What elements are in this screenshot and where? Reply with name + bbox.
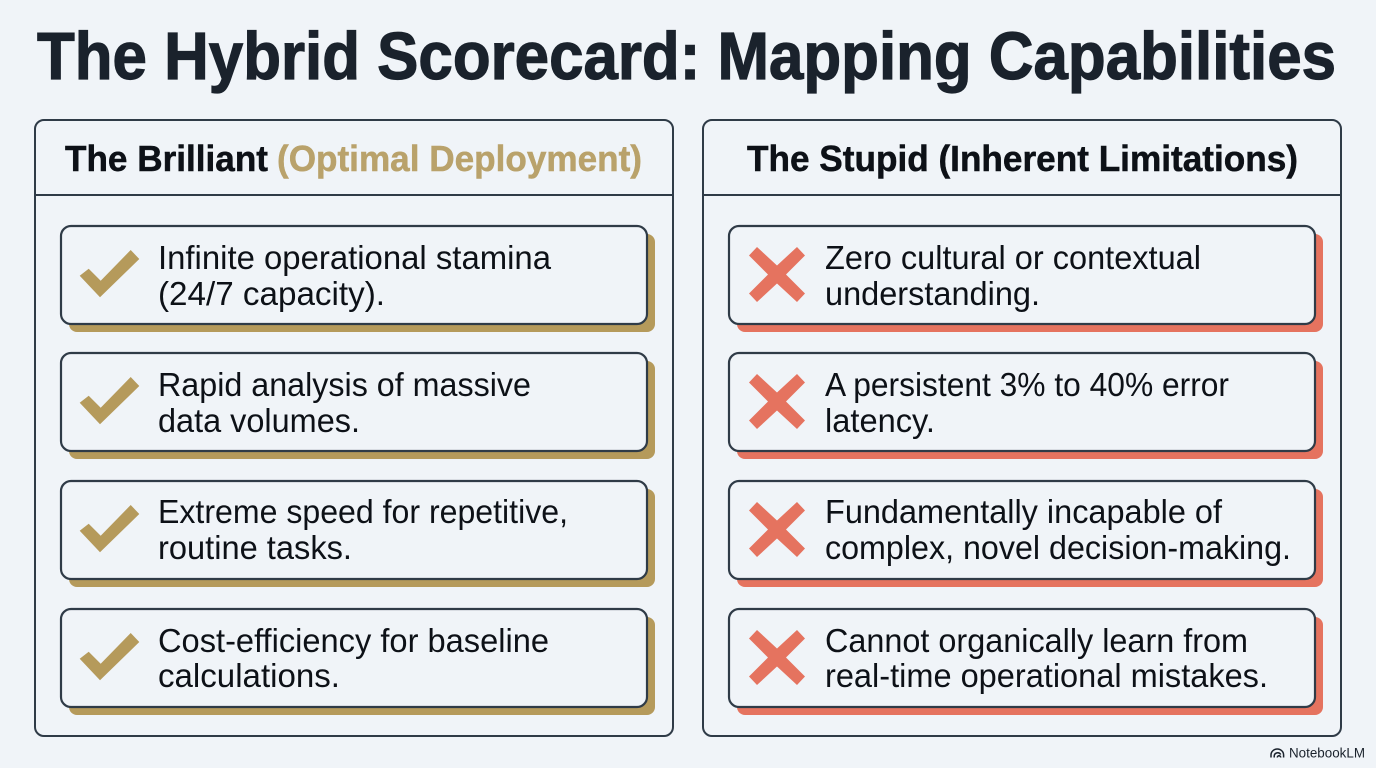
- text: cannot learn: real-time operational mistakes.: [825, 657, 1268, 694]
- icon: cross mark: [749, 247, 805, 302]
- text: cost efficiency: calculations.: [158, 657, 340, 694]
- text: error latency: A persistent 3% to 40% error: [825, 366, 1229, 403]
- text: rapid analysis: Rapid analysis of massive: [158, 366, 531, 403]
- icon: NotebookLM logo: [1271, 749, 1284, 758]
- heading: The Brilliant (Optimal Deployment): The Brilliant: [65, 138, 268, 179]
- icon: check mark: [80, 377, 139, 424]
- text: error latency: latency.: [825, 402, 935, 439]
- text: extreme speed: routine tasks.: [158, 529, 352, 566]
- text: cannot learn: Cannot organically learn from: [825, 622, 1248, 659]
- text: cost efficiency: [158, 622, 549, 694]
- text: cannot learn: [825, 622, 1268, 694]
- text: rapid analysis: data volumes.: [158, 402, 360, 439]
- card: zero cultural: [729, 226, 1323, 332]
- card: cost efficiency: [61, 609, 655, 715]
- text: error latency: [825, 366, 1229, 439]
- text: zero cultural: understanding.: [825, 275, 1040, 312]
- text: infinite stamina: (24/7 capacity).: [158, 275, 385, 312]
- card: error latency: [729, 353, 1323, 459]
- card: rapid analysis: [61, 353, 655, 459]
- text: incapable of decisions: complex, novel decision-making.: [825, 529, 1291, 566]
- text: infinite stamina: [158, 239, 552, 312]
- text: cost efficiency: Cost-efficiency for baseline: [158, 622, 549, 659]
- icon: cross mark: [749, 630, 805, 685]
- icon: check mark: [80, 633, 139, 680]
- text: incapable of decisions: [825, 493, 1291, 566]
- panel: The Stupid: [703, 120, 1341, 736]
- watermark: NotebookLM: NotebookLM: [1289, 746, 1365, 760]
- icon: check mark: [80, 250, 139, 297]
- heading: The Stupid (Inherent Limitations): The Stupid (Inherent Limitations): [747, 138, 1298, 179]
- text: infinite stamina: Infinite operational stamina: [158, 239, 552, 276]
- text: incapable of decisions: Fundamentally incapable of: [825, 493, 1223, 530]
- panel: The Brilliant: [35, 120, 673, 736]
- text: zero cultural: [825, 239, 1201, 312]
- heading: The Brilliant (Optimal Deployment): [65, 138, 642, 179]
- text: zero cultural: Zero cultural or contextual: [825, 239, 1201, 276]
- icon: check mark: [80, 505, 139, 552]
- card: extreme speed: [61, 481, 655, 587]
- icon: cross mark: [749, 374, 805, 429]
- card: incapable of decisions: [729, 481, 1323, 587]
- text: rapid analysis: [158, 366, 531, 439]
- heading: The Brilliant (Optimal Deployment): (Optimal Deployment): [277, 138, 642, 179]
- card: infinite stamina: [61, 226, 655, 332]
- text: extreme speed: [158, 493, 568, 566]
- text: extreme speed: Extreme speed for repetitive,: [158, 493, 568, 530]
- icon: cross mark: [749, 502, 805, 557]
- card: cannot learn: [729, 609, 1323, 715]
